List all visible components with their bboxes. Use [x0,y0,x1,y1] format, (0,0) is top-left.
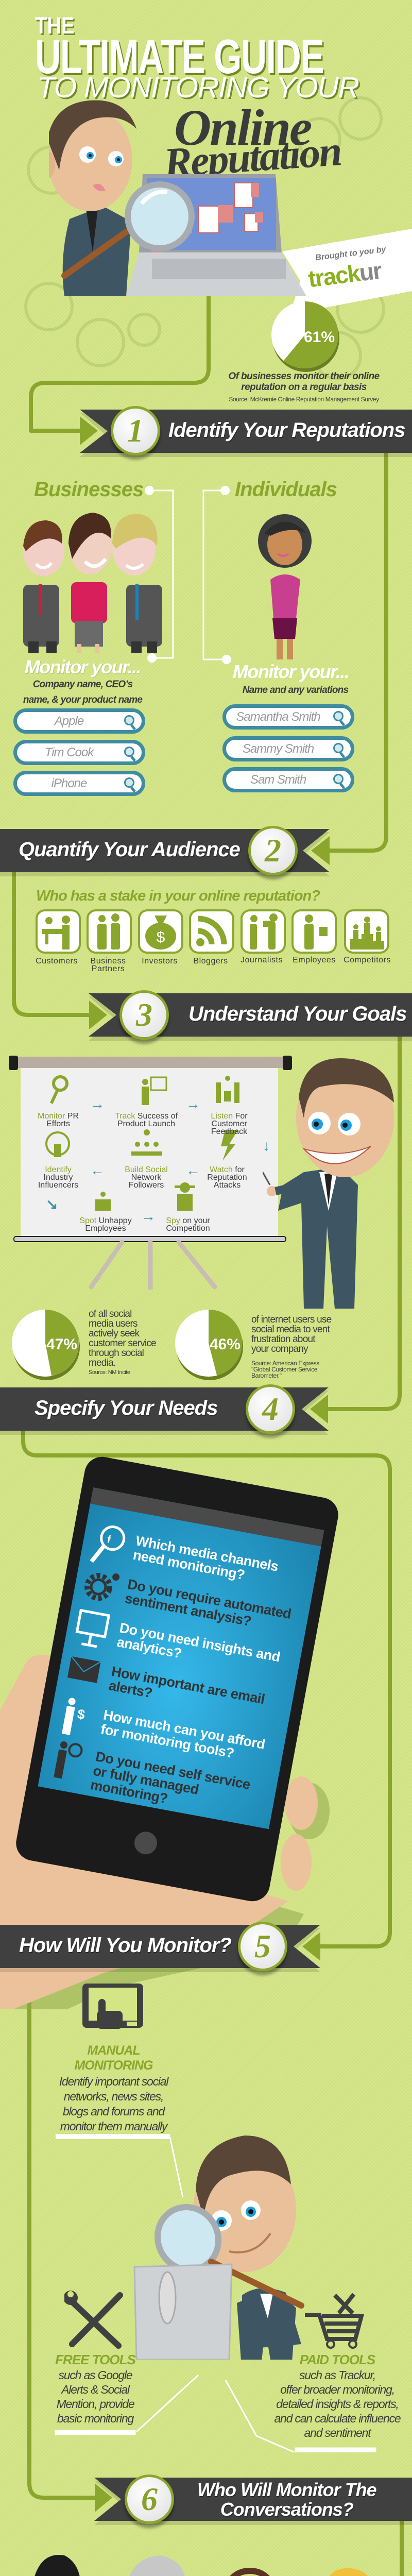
title: THE [35,12,74,39]
icon: bloggers [189,909,234,954]
whiteboard: goals: Followers [129,1181,164,1190]
whiteboard: goals: Influencers [38,1181,78,1190]
stat text: 61% of businesses: reputation on a regular basis [241,382,367,393]
whiteboard: goals: Build Social [125,1165,168,1174]
banner 3: understand your goals [89,990,412,1046]
phone with questions [13,1454,341,1904]
whiteboard: goals: Network [131,1173,161,1182]
whiteboard: goals: Industry [44,1173,73,1182]
text: free tools: basic monitoring [57,2412,133,2425]
banner 2: quantify your audience [0,826,330,881]
stat text: 47%: media. [89,1358,115,1368]
search boxes: businesses: iPhone [52,776,87,790]
text: manual monitoring: Identify important social [59,2075,168,2088]
title: online reputation script: Online [174,99,311,156]
stakeholder labels: Customers [36,957,78,965]
title: online reputation script [162,99,342,187]
banner: brought to you by trackur: trackur [306,257,383,292]
search boxes: individuals: Samantha Smith [236,710,320,724]
banner 1: identify your reputations: Identify Your Reputations [168,419,405,442]
stakeholder labels: Journalists [241,956,283,964]
stakeholder labels [36,956,391,973]
question 3: Do you need insights and [118,1620,281,1665]
search boxes: individuals: Sammy Smith [243,742,314,756]
text: paid tools [265,2352,409,2442]
banner 5: how will you monitor: How Will You Monitor? [19,1934,231,1957]
question 6 [54,1741,251,1806]
illustration: presenter man [263,1058,394,1309]
text: monitor them manually [60,2120,167,2133]
text: paid tools: and sentiment [304,2426,370,2439]
banner 4: specify your needs [0,1384,329,1439]
stat text: 46%: of internet users use [251,1314,331,1325]
whiteboard: goals: ↘ [46,1196,58,1212]
question 6: monitoring? [89,1777,169,1806]
question 1: f [106,1534,112,1546]
whiteboard: goals: Feedback [211,1127,247,1136]
text: monitor your (individuals): Monitor your... [233,661,349,682]
title: TO MONITORING YOUR [37,71,359,104]
stakeholder labels: Business [91,957,126,965]
stakeholder labels: Bloggers [193,957,228,965]
question 4: How important are email [110,1664,266,1707]
stat text: 47%: actively seek [89,1328,139,1339]
faint background icon circles [24,96,385,380]
question 2: Do you require automated [126,1577,293,1622]
icon: customers [36,909,81,954]
banner 3: understand your goals: 3 [136,996,152,1033]
question 3 [75,1608,281,1665]
illustration: business people group [23,513,162,653]
heading: individuals: Individuals [235,478,337,501]
pie chart: 47% [12,1310,80,1380]
whiteboard: goals: Spot Unhappy [79,1216,132,1225]
whiteboard: goals: Track Success of [115,1112,178,1121]
connector lines [145,486,231,664]
question 2: sentiment analysis? [124,1590,252,1629]
goal labels: Monitor PR [38,1112,79,1121]
text: free tools: FREE TOOLS [55,2352,135,2367]
heading: who has a stake: Who has a stake in your online reputation? [36,888,320,904]
banner 1: identify your reputations [80,406,412,462]
banner 5: how will you monitor [0,1922,320,1977]
text: free tools: Mention, provide [57,2397,134,2411]
text: monitor your (individuals) [233,661,349,696]
question 1: Which media channels [134,1533,280,1574]
question 4 [67,1656,266,1707]
whiteboard: goals: Reputation [207,1173,247,1182]
question 1: need monitoring? [132,1547,246,1583]
banner 5: how will you monitor: 5 [254,1928,271,1964]
text: paid tools: offer broader monitoring, [280,2383,394,2396]
text: paid tools: and can calculate influence [274,2412,401,2425]
banner: brought to you by trackur: Brought to you by [315,245,386,262]
whiteboard: goals: Product Launch [117,1120,175,1128]
goal labels [38,1112,79,1128]
banner 6: who will monitor the conversations: Conversations? [220,2499,353,2520]
stat text: 46%: social media to vent [251,1324,330,1335]
text: free tools [46,2352,144,2429]
stat text: 47%: through social [89,1348,144,1359]
whiteboard: goals: → [186,1096,200,1112]
question 5: How much can you afford [102,1707,266,1752]
whiteboard: goals: ← [90,1162,105,1178]
search boxes: individuals [222,704,354,792]
icon: paid tools cart [304,2290,368,2349]
stat text: 46%: "Global Customer Service [251,1366,317,1373]
stat text: 46%: Barometer." [251,1372,282,1379]
pie chart: 46% [175,1310,243,1380]
stakeholder icons [36,909,389,954]
stat text: 46%: your company [251,1344,308,1354]
question 5: for monitoring tools? [99,1721,235,1761]
pie chart: 61%: 61% [304,329,335,346]
text: paid tools: detailed insights & reports, [276,2397,399,2411]
whiteboard: goals: ↓ [263,1138,270,1154]
text: monitor your (businesses): Company name, CEO’s [33,679,132,690]
icon: business partners [87,909,132,954]
banner: brought to you by trackur [282,229,412,308]
icon: employees [291,909,337,954]
pie chart: 61% [271,301,339,372]
stat text: 47% [89,1309,156,1376]
illustration: man with magnifier and laptop [49,100,306,296]
whiteboard: goals: Attacks [214,1181,241,1190]
text: free tools: such as Google [58,2368,132,2382]
whiteboard: goals [9,1056,292,1290]
stakeholder labels: Competitors [344,956,391,964]
title: ULTIMATE GUIDE [35,29,323,83]
question 1 [90,1526,280,1583]
whiteboard: goals: Identify [45,1165,72,1174]
whiteboard: goals: Competition [166,1224,210,1233]
pie chart: 47%: 47% [46,1336,77,1353]
text: monitor your (individuals): Name and any variations [243,685,348,696]
question 6: or fully managed [92,1763,200,1798]
stat text: 46% [251,1314,332,1379]
pie chart: 46%: 46% [210,1336,241,1353]
goal icons [45,1075,239,1211]
banner 4: specify your needs: Specify Your Needs [35,1397,217,1419]
banner 2: quantify your audience: 2 [265,832,281,869]
search boxes: businesses: Apple [55,714,83,728]
text: monitor your (businesses) [23,656,142,705]
icon: investors: $ [157,929,165,946]
heading: businesses: Businesses [34,478,143,501]
stat text: 46%: frustration about [251,1334,315,1345]
icon: manual tablet hand [82,1984,143,2029]
text: free tools: Alerts & Social [61,2383,129,2396]
arrows between goals: → [90,1096,105,1112]
banner 6: who will monitor the conversations [94,2478,412,2521]
illustration: individual woman [258,514,312,659]
whiteboard: goals: Spy on your [166,1216,210,1225]
banner 2: quantify your audience: Quantify Your Audience [19,838,240,861]
question 6: Do you need self service [94,1749,251,1792]
search boxes: businesses: Tim Cook [45,745,93,759]
search boxes: individuals: Sam Smith [250,773,306,787]
stakeholder labels: Investors [142,957,178,965]
icon: journalists [241,909,286,954]
question 4: alerts? [108,1677,153,1701]
stat text: 47%: media users [89,1318,138,1329]
banner 6: who will monitor the conversations: 6 [141,2481,158,2517]
text: paid tools: PAID TOOLS [300,2352,375,2367]
text: manual monitoring [59,2043,169,2133]
characters: intern, PR firm, CEO, community manager [15,2545,381,2576]
icon: investors [138,909,183,954]
question 3: analytics? [116,1634,183,1661]
icon: free tools wrench & screwdriver [64,2291,123,2349]
whiteboard: goals: Watch for [210,1165,245,1174]
illustration: hands holding phone [0,1655,330,2009]
whiteboard: goals: ← [186,1162,200,1178]
whiteboard: goals: Employees [85,1224,126,1233]
whiteboard: goals: → [141,1208,156,1224]
whiteboard: goals: Customer [211,1120,247,1128]
text: manual monitoring: blogs and forums and [63,2105,164,2118]
stat text: 61% of businesses: Source: McKremie Online Reputation Management Survey [229,396,379,403]
stakeholder labels: Partners [92,964,125,973]
illustration: man inspecting laptop [134,2136,304,2360]
title: online reputation script: Reputation [162,127,342,187]
question 5: $ [76,1706,87,1722]
text: monitor your (businesses): name, & your product name [23,694,142,705]
banner 3: understand your goals: Understand Your Goals [188,1003,407,1025]
stat text: 47%: customer service [89,1338,156,1349]
phone screen [38,1487,324,1829]
question 5 [62,1698,266,1761]
text: monitor your (businesses): Monitor your... [25,656,141,677]
whiteboard: goals: Listen For [211,1112,248,1121]
search boxes: businesses [13,708,145,796]
icon: competitors [344,909,389,954]
banner 1: identify your reputations: 1 [127,412,144,449]
stat text: 47%: of all social [89,1309,132,1319]
text: manual monitoring: networks, news sites, [64,2090,163,2103]
stat text: 61% of businesses: Of businesses monitor their online [228,371,380,382]
banner 4: specify your needs: 4 [262,1391,279,1427]
text: manual monitoring: MONITORING [74,2058,153,2073]
goal labels: Efforts [46,1120,70,1128]
home button [132,1830,159,1856]
banner 6: who will monitor the conversations: Who Will Monitor The [197,2479,376,2500]
title [35,12,360,104]
text: paid tools: such as Trackur, [299,2368,375,2382]
stat text: 47%: Source: NM Incite [89,1369,130,1376]
text: manual monitoring: MANUAL [87,2043,140,2058]
stat text: 61% of businesses [228,371,380,403]
stat text: 46%: Source: American Express [251,1360,319,1367]
stakeholder labels: Employees [293,956,336,964]
question 2 [84,1573,293,1629]
